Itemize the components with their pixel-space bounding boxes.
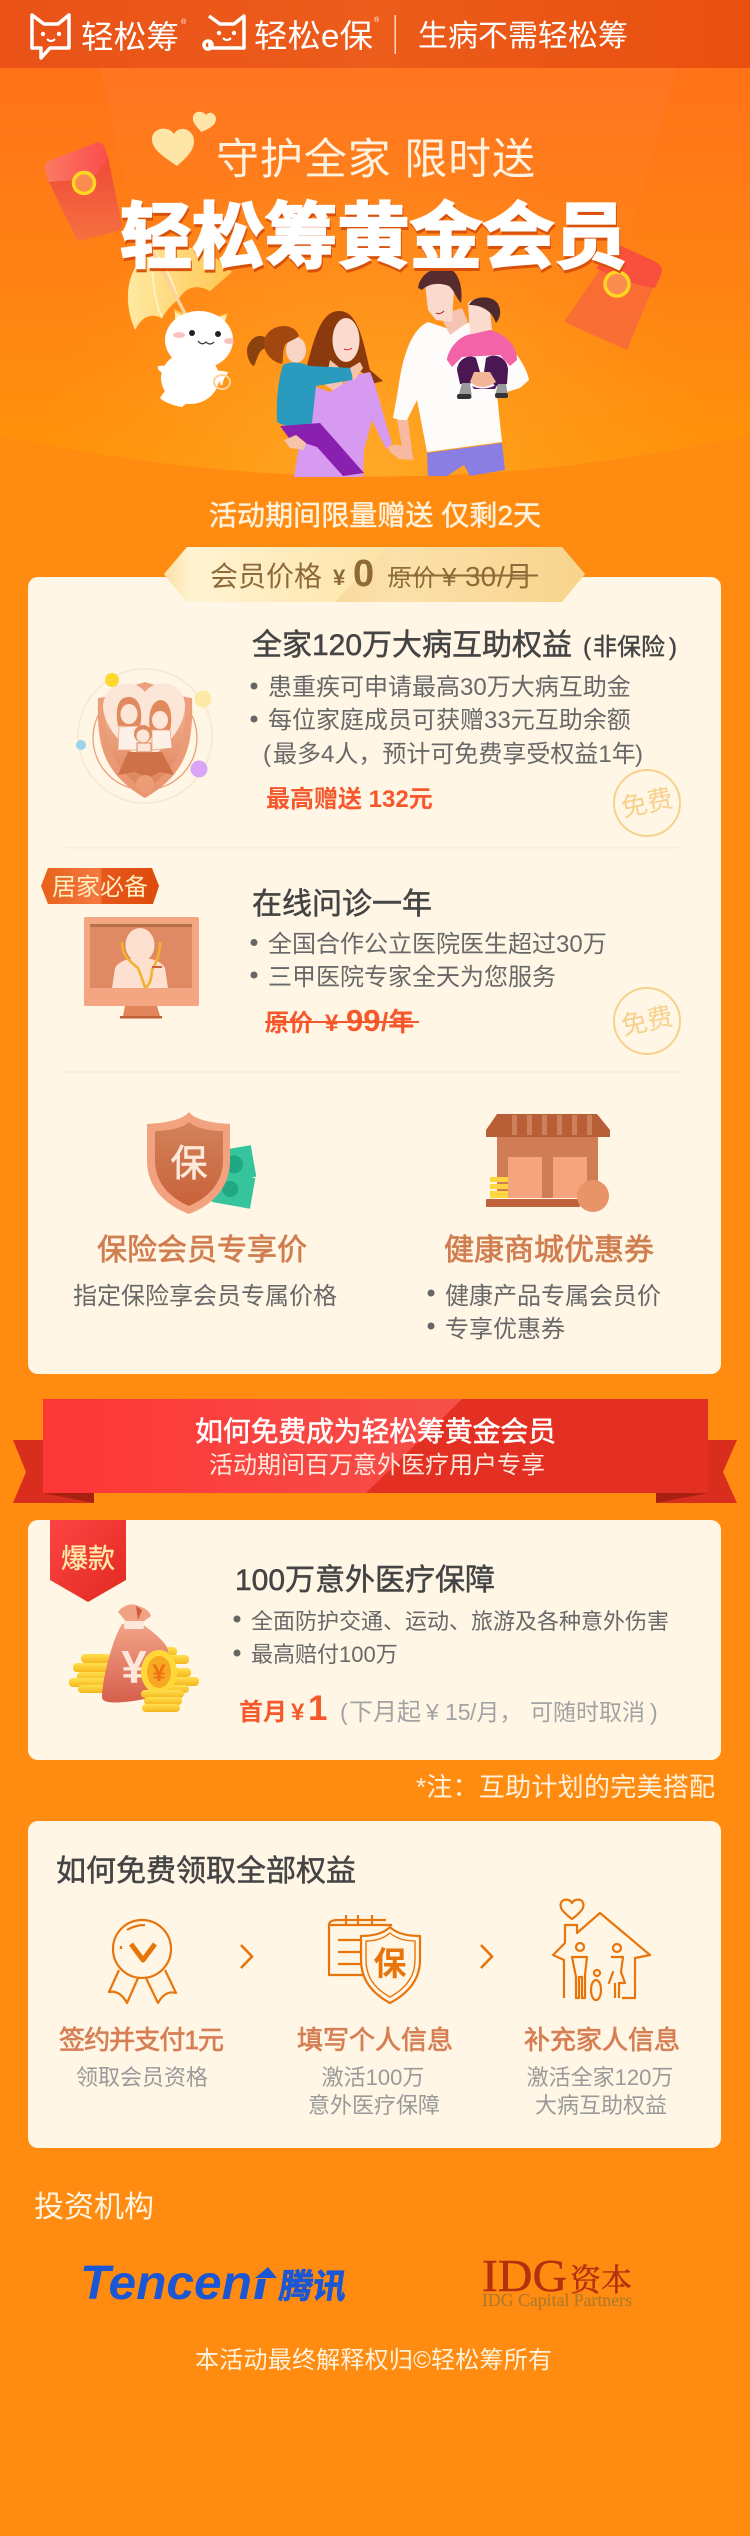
icon: form and shield: [329, 1915, 420, 2003]
panel: how to claim: [28, 1821, 721, 2148]
logo: IDG Capital: 资本: [570, 2263, 632, 2298]
hero subtitle: 守护全家 限时送: [216, 136, 535, 184]
illustration: money bag and coins: ¥: [121, 1641, 147, 1693]
card background: [28, 1821, 721, 2148]
price ribbon: [164, 547, 585, 602]
mall bullets: 专享优惠券: [445, 1316, 565, 1343]
later price: 下月起: [349, 1699, 421, 1726]
insurance description: 指定保险享会员专属价格: [73, 1283, 337, 1310]
step 2 description: 意外医疗保障: [308, 2093, 440, 2118]
illustration: insurance shield with cash: 保: [170, 1143, 208, 1184]
benefit bullets: (: [263, 741, 271, 768]
price label: 会员价格: [210, 561, 322, 592]
red envelope right: [564, 244, 662, 350]
benefit bullets: 最多4人，预计可免费享受权益1年: [273, 741, 636, 768]
later price: [340, 1699, 658, 1726]
panel: accident cover: [28, 1520, 721, 1760]
step 2 description: 激活100万: [322, 2065, 424, 2090]
red envelope left: [45, 142, 122, 240]
non-insurance note: 非保险: [593, 634, 665, 661]
illustration: insurance shield with cash: [147, 1112, 256, 1214]
logo: Tencent: Tencen: [80, 2257, 252, 2310]
hero background with rays: [0, 68, 750, 476]
logo: Tencent: 腾讯: [277, 2268, 349, 2306]
benefit bullets: 患重疾可申请最高30万大病互助金: [268, 674, 631, 701]
woman: [294, 311, 411, 477]
heading: 如何免费领取全部权益: [56, 1855, 356, 1888]
stamp: free: 免费: [618, 783, 676, 823]
bullets: 全面防护交通、运动、旅游及各种意外伤害: [251, 1609, 669, 1634]
girl: [247, 326, 364, 476]
logo name 轻松筹: 轻松筹: [81, 19, 179, 55]
bookmark badge: [50, 1520, 126, 1602]
footer: 本活动最终解释权归©轻松筹所有: [195, 2347, 552, 2374]
bookmark badge: 爆款: [61, 1544, 115, 1574]
card background: [28, 577, 721, 1374]
original price: /月: [497, 561, 533, 592]
icon: family house: [553, 1900, 650, 2000]
struck-out price: ¥: [325, 1010, 339, 1037]
stamp: free: [614, 988, 680, 1054]
step 2 description: [308, 2065, 440, 2118]
tag: home essential: 居家必备: [52, 874, 148, 901]
promo line: 活动期间限量赠送 仅剩2天: [209, 500, 541, 531]
registered mark: ®: [181, 18, 187, 26]
consult bullets: 三甲医院专家全天为您服务: [268, 964, 556, 991]
step 1 label: 签约并支付1元: [59, 2025, 224, 2055]
hero main title: 轻松筹黄金会员: [121, 201, 628, 281]
bullets: 最高赔付100万: [251, 1642, 398, 1667]
first month price: 首月: [239, 1699, 287, 1726]
step 3 label: 补充家人信息: [524, 2025, 680, 2055]
consult bullets: [250, 931, 607, 991]
top header bar: [0, 0, 750, 68]
price zero: ¥: [333, 565, 346, 590]
hero main title: 轻松筹黄金会员: [120, 198, 627, 278]
registered mark: ®: [374, 16, 380, 24]
icon: medal: [109, 1920, 176, 2003]
original price: ¥: [441, 562, 457, 592]
hearts: [152, 112, 216, 166]
red banner: [13, 1399, 737, 1503]
heading: family mutual aid: 全家120万大病互助权益: [252, 629, 572, 662]
struck-out price: 原价: [265, 1010, 313, 1037]
separator: [394, 15, 396, 54]
logo: IDG Capital: IDG: [482, 2250, 567, 2301]
benefit bullets: ): [635, 741, 643, 768]
man: [393, 267, 529, 476]
investors heading: 投资机构: [34, 2191, 154, 2224]
first month price: [239, 1689, 327, 1728]
original price: 原价: [388, 565, 436, 592]
illustration: shop: [486, 1114, 610, 1212]
non-insurance note: (: [583, 634, 591, 661]
heading: 100万意外医疗保障: [235, 1564, 495, 1597]
price zero: [333, 553, 374, 595]
heading: insurance price: 保险会员专享价: [97, 1234, 307, 1267]
logo: IDG Capital: IDG Capital Partners: [482, 2290, 632, 2310]
bullets: [234, 1609, 669, 1667]
arrow: [241, 1945, 252, 1968]
benefit bullets: 每位家庭成员可获赠33元互助余额: [268, 707, 631, 734]
panel: member benefits: [28, 547, 721, 1374]
step 3 description: 大病互助权益: [535, 2093, 667, 2118]
slogan: 生病不需轻松筹: [418, 20, 628, 53]
later price: 15: [445, 1699, 471, 1725]
price zero: 0: [353, 553, 374, 595]
first month price: 1: [308, 1689, 327, 1728]
logo name 轻松e保: 轻松e保: [254, 18, 373, 54]
cat mascot: [158, 309, 234, 407]
later price: 可随时取消: [530, 1699, 645, 1725]
icon: cat logo: [32, 15, 69, 58]
logo: IDG Capital: [482, 2250, 632, 2310]
heading: online consult: 在线问诊一年: [252, 888, 432, 921]
illustration: money bag and coins: [69, 1604, 199, 1712]
logo: Tencent: [80, 2257, 349, 2310]
arrow: [481, 1945, 492, 1968]
later price: ): [650, 1699, 658, 1725]
banner subtitle: 活动期间百万意外医疗用户专享: [209, 1452, 545, 1479]
tag: home essential: [41, 868, 159, 904]
umbrella: [128, 246, 232, 385]
later price: (: [340, 1699, 348, 1725]
stamp: free: 免费: [618, 1001, 676, 1041]
step 1 description: 领取会员资格: [76, 2065, 208, 2090]
card background: [28, 1520, 721, 1760]
later price: /月，: [470, 1699, 522, 1725]
max gift: 最高赠送 132元: [266, 786, 433, 813]
banner title: 如何免费成为轻松筹黄金会员: [195, 1416, 556, 1447]
step 3 description: [527, 2065, 673, 2118]
illustration: money bag and coins: ¥: [152, 1660, 166, 1687]
struck-out price: 99: [346, 1003, 380, 1038]
step 2 label: 填写个人信息: [297, 2025, 453, 2055]
mall bullets: [428, 1283, 661, 1343]
original price: 30: [465, 561, 496, 592]
consult bullets: 全国合作公立医院医生超过30万: [268, 931, 607, 958]
baby: [447, 297, 517, 399]
struck-out price: /年: [381, 1007, 414, 1037]
icon: cat logo e-bao: [204, 16, 244, 49]
illustration: doctor on monitor: [84, 917, 199, 1018]
illustration: family shield: [76, 669, 212, 803]
step 3 description: 激活全家120万: [527, 2065, 673, 2090]
icon: form and shield: 保: [374, 1945, 406, 1982]
later price: ¥: [425, 1699, 439, 1725]
stamp: free: [614, 770, 680, 836]
banner tails: [13, 1440, 737, 1503]
footnote: *注：互助计划的完美搭配: [416, 1772, 715, 1802]
original price: [388, 561, 538, 592]
heading: health mall: 健康商城优惠券: [444, 1234, 654, 1267]
non-insurance note: ): [669, 634, 677, 661]
struck-out price: [265, 1003, 419, 1038]
first month price: ¥: [291, 1699, 305, 1726]
mall bullets: 健康产品专属会员价: [445, 1283, 661, 1310]
benefit bullets: [250, 674, 643, 768]
family illustration: [247, 267, 529, 477]
